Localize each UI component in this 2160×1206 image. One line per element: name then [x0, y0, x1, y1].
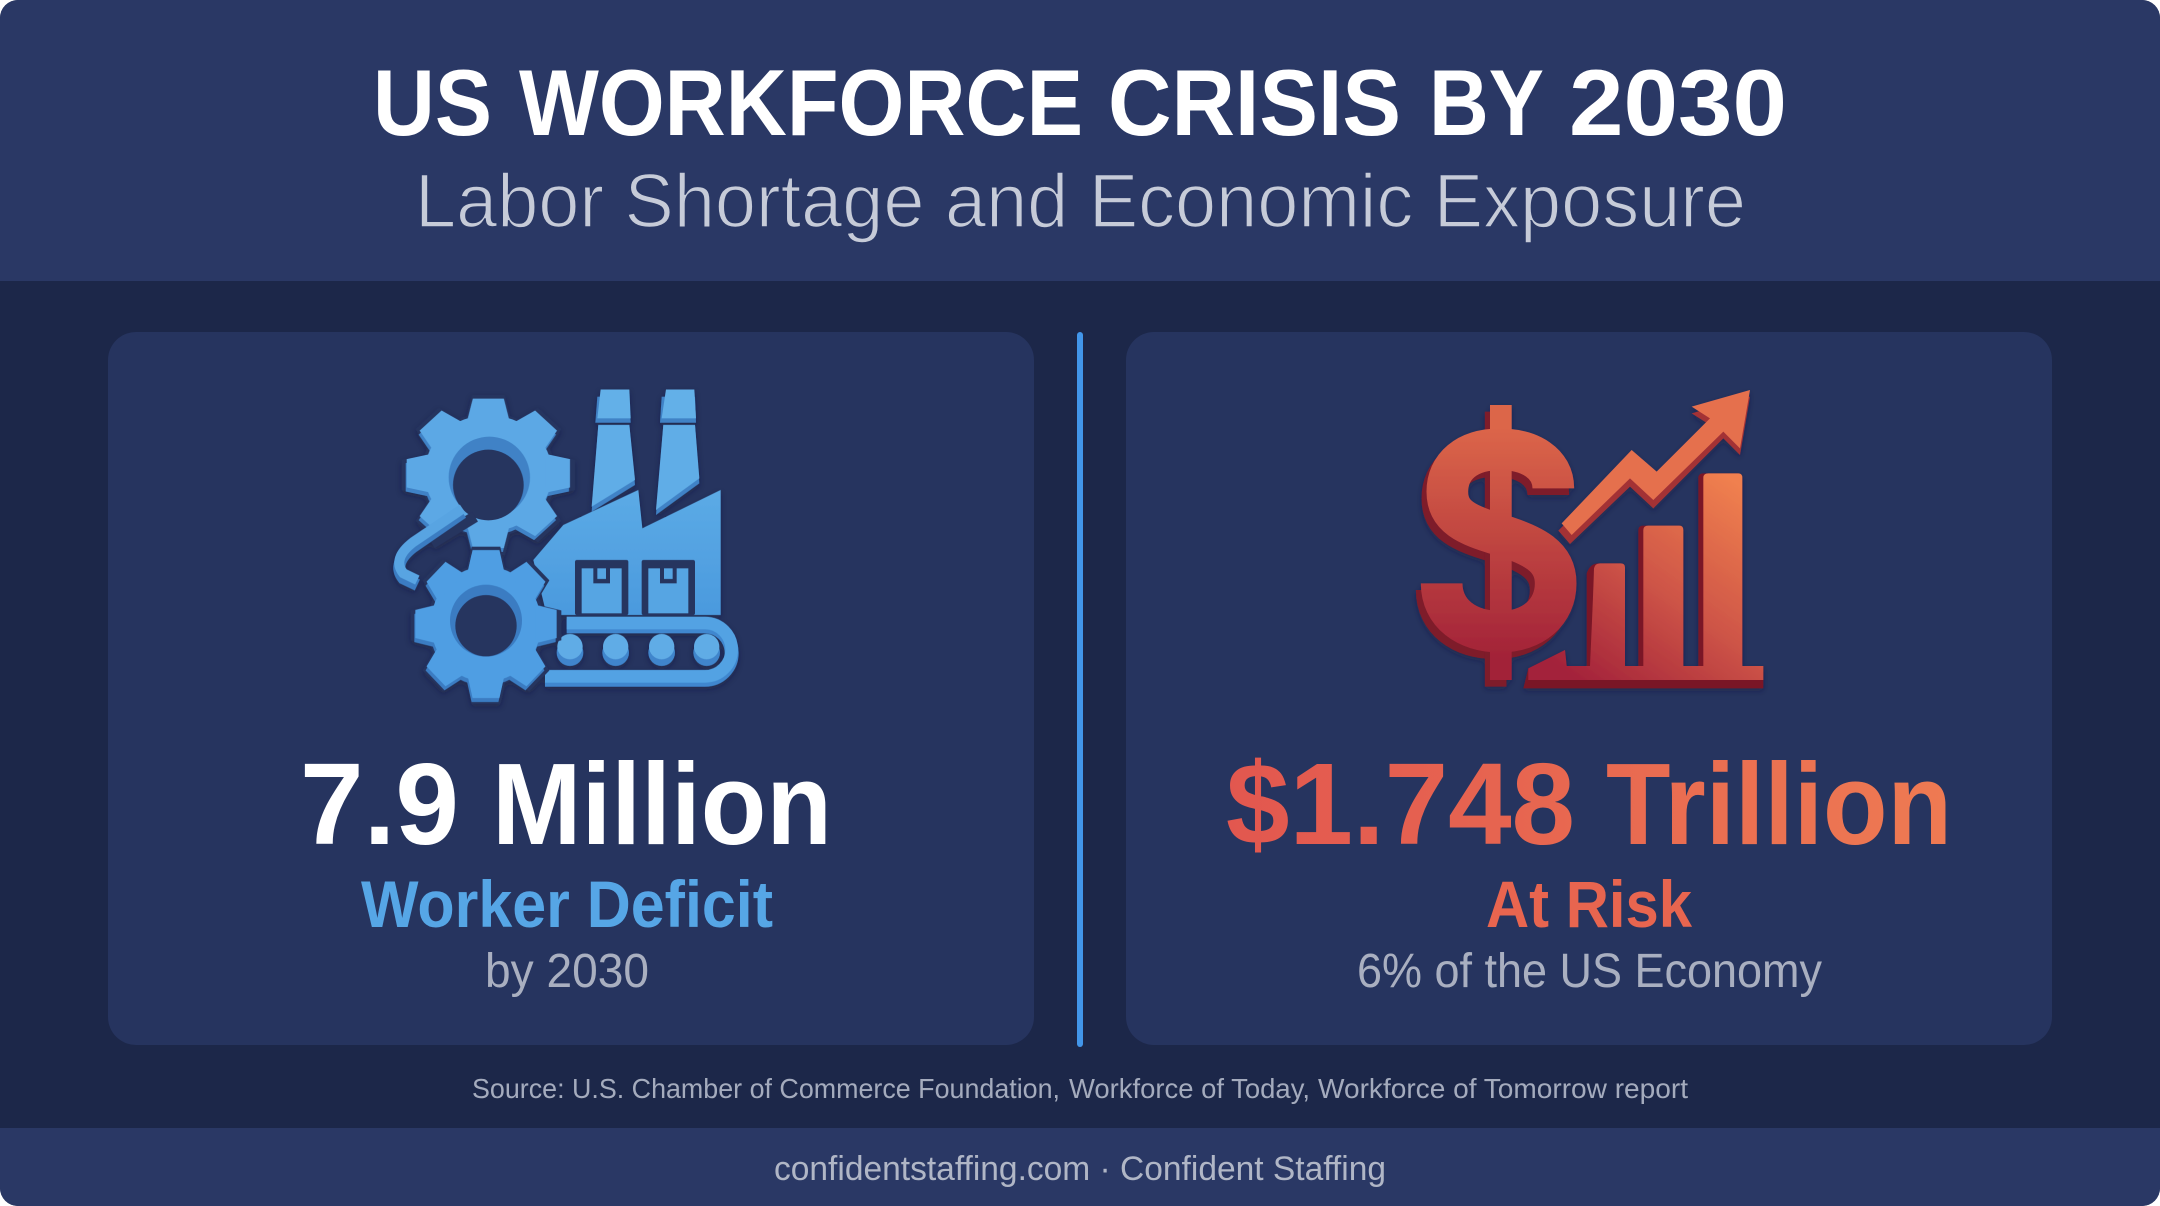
footer band	[0, 1128, 2160, 1206]
note: share of US economy: 6% of the US Economy	[1357, 945, 1822, 998]
value: 7.9 Million: Million	[492, 739, 832, 869]
label: At Risk: At Risk	[1486, 867, 1692, 941]
title: BY	[1429, 50, 1544, 155]
icon: dollar sign with rising bars and arrow	[1437, 390, 1763, 688]
label: Worker Deficit: Worker Deficit	[361, 867, 773, 941]
value: 7.9 Million	[304, 760, 826, 845]
header band	[0, 0, 2160, 281]
source line: Workforce of Today,	[1069, 1073, 1310, 1104]
panel: economic risk	[1126, 332, 2052, 1045]
title: US	[373, 50, 492, 155]
divider	[1077, 332, 1083, 1047]
value: $1.748 Trillion: $1.748	[1226, 739, 1575, 869]
note: by 2030: by 2030	[485, 945, 649, 998]
icon: factory with gears and conveyor	[399, 389, 732, 704]
source line: Workforce of Tomorrow report	[1318, 1073, 1688, 1104]
title: WORKFORCE	[519, 50, 1083, 155]
title	[378, 70, 1783, 136]
source line	[472, 1073, 1688, 1104]
value: $1.748 Trillion: Trillion	[1606, 739, 1952, 869]
footer text: confidentstaffing.com · Confident Staffing	[774, 1150, 1386, 1188]
title: 2030	[1569, 50, 1787, 155]
source line: Source: U.S. Chamber of Commerce Foundation,	[472, 1073, 1060, 1104]
subtitle: Labor Shortage and Economic Exposure	[415, 159, 1746, 244]
panel: worker deficit	[108, 332, 1034, 1045]
value: 7.9 Million: 7.9	[300, 739, 459, 869]
title: CRISIS	[1108, 50, 1401, 155]
value: $1.748 Trillion	[1228, 758, 1946, 852]
